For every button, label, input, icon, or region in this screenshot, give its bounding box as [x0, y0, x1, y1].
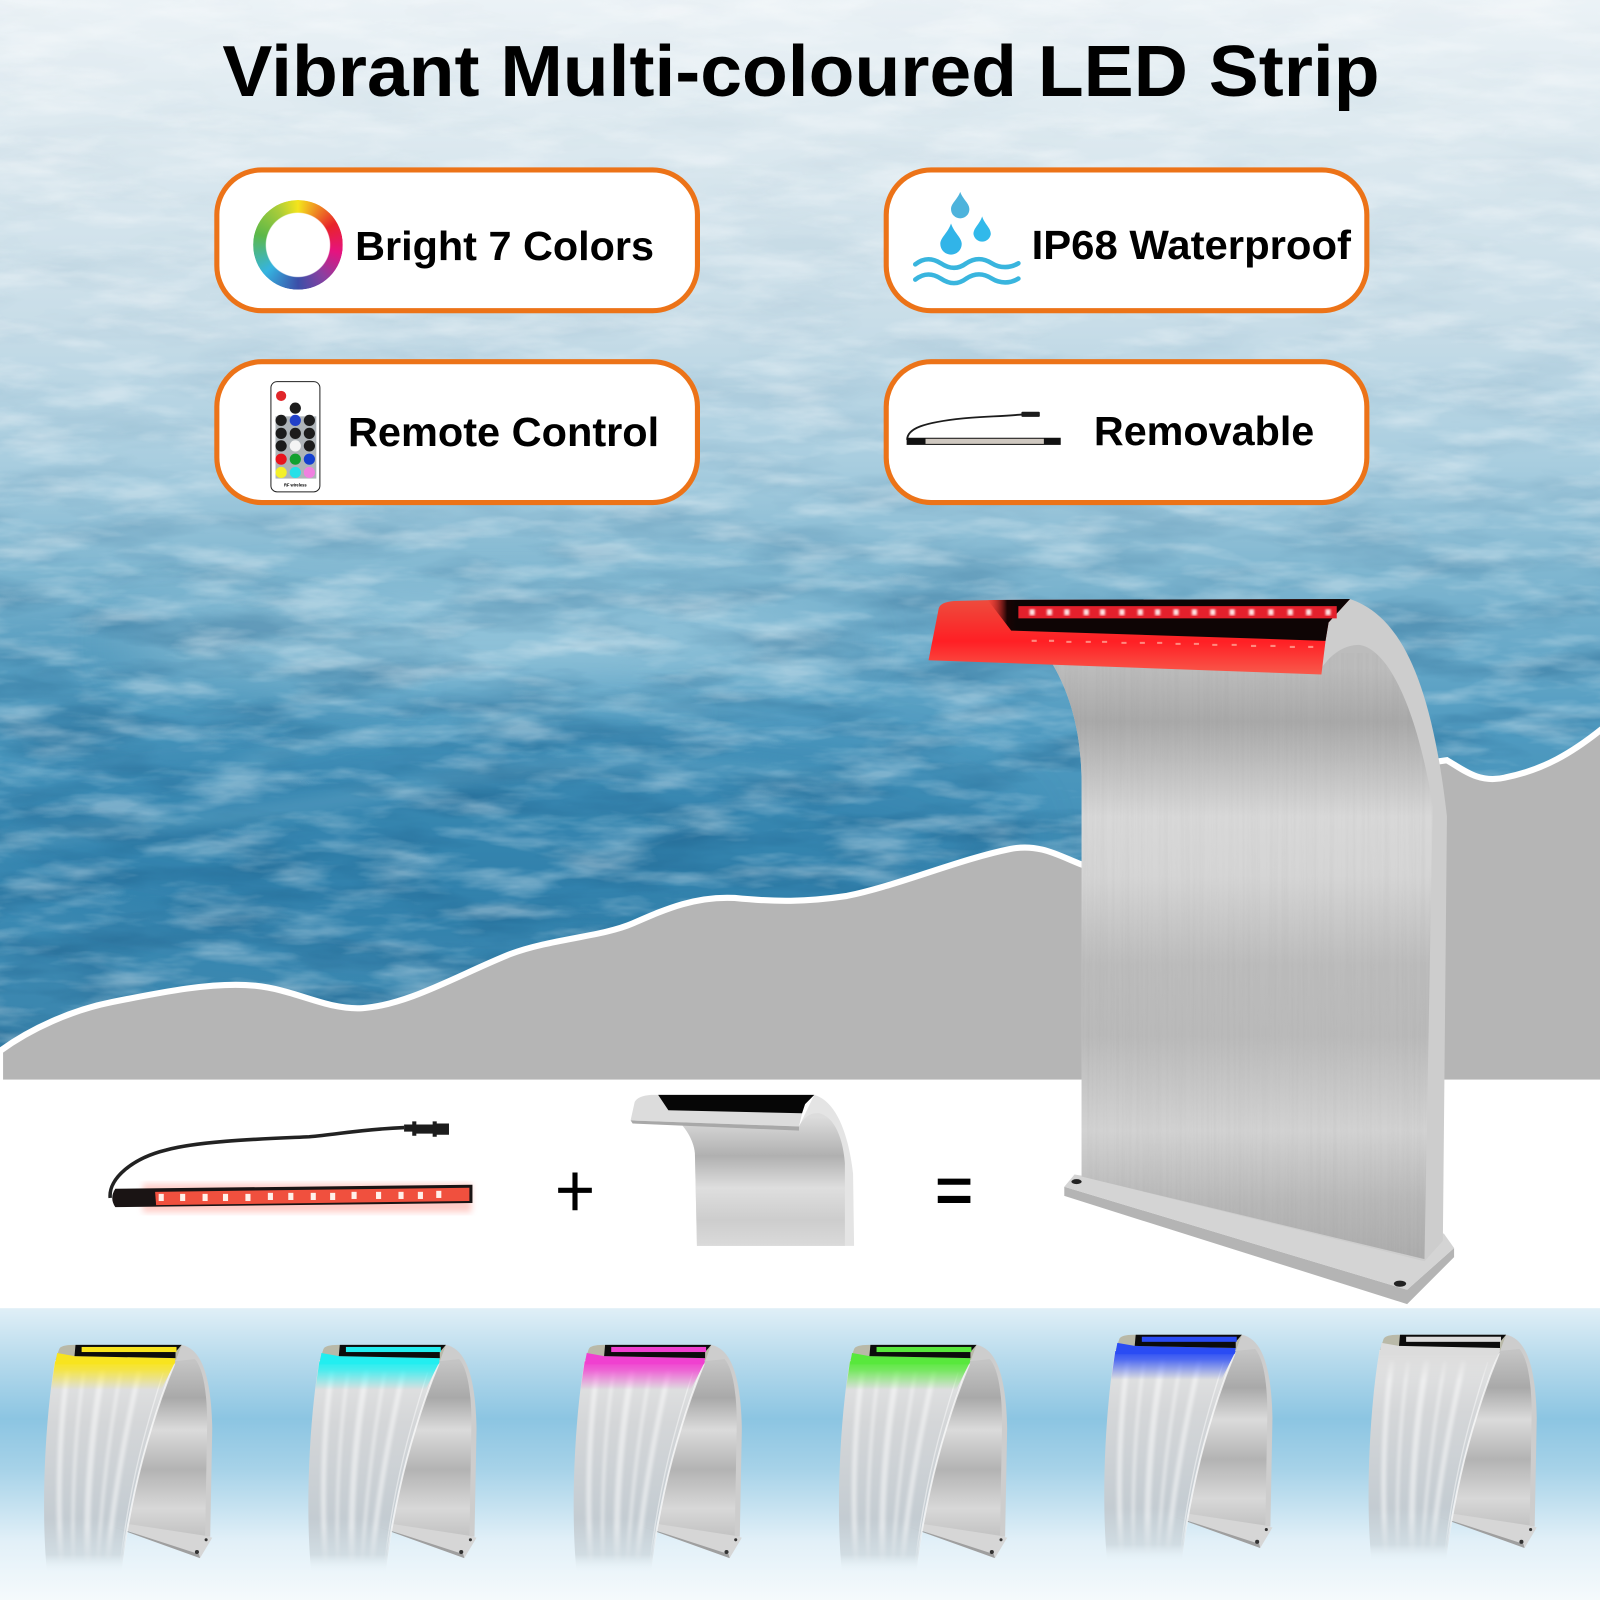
- label: IP68 Waterproof: [1032, 222, 1351, 268]
- waterfall: yellow: [44, 1345, 212, 1571]
- card: Remote Control: [217, 362, 697, 503]
- icon: remote control: [271, 382, 320, 492]
- card: IP68 Waterproof: [886, 170, 1367, 311]
- red lip: [929, 599, 1350, 674]
- LED strip: [1018, 606, 1337, 618]
- card: Bright 7 Colors: [217, 170, 697, 311]
- waterfall: cyan: [308, 1345, 477, 1571]
- card: Removable: [886, 362, 1367, 503]
- label: Removable: [1094, 408, 1314, 454]
- brushed steel front: [1049, 645, 1433, 1259]
- waterfall: white: [1369, 1335, 1537, 1561]
- waterfall: green: [839, 1345, 1007, 1571]
- equation: unlit spillway: [631, 1095, 854, 1246]
- icon: colour ring: [253, 200, 343, 290]
- brushed texture: [1051, 653, 1439, 1265]
- icon: remote control: RF wireless: [284, 483, 307, 488]
- title: Vibrant Multi-coloured LED Strip: [222, 31, 1380, 112]
- light blue colour band: [0, 1308, 1600, 1600]
- label: Remote Control: [348, 409, 659, 455]
- icon: removable LED strip: [907, 412, 1061, 445]
- base plate: [1064, 1174, 1454, 1304]
- ocean background: [0, 0, 1600, 1082]
- plus sign: [558, 1172, 592, 1210]
- LED reflections: [1032, 641, 1313, 647]
- equals sign: [938, 1179, 970, 1203]
- equation: LED strip: [110, 1121, 472, 1212]
- gray wave section: [0, 720, 1600, 1092]
- dark recess: [988, 599, 1350, 641]
- curved side band: [1049, 599, 1447, 1261]
- label: Bright 7 Colors: [355, 223, 654, 269]
- icon: water drops and waves: [915, 192, 1018, 283]
- waterfall: blue: [1104, 1335, 1272, 1561]
- waterfall: magenta: [574, 1345, 742, 1571]
- white section: [0, 1080, 1600, 1308]
- main product: red lit spillway: [929, 599, 1454, 1304]
